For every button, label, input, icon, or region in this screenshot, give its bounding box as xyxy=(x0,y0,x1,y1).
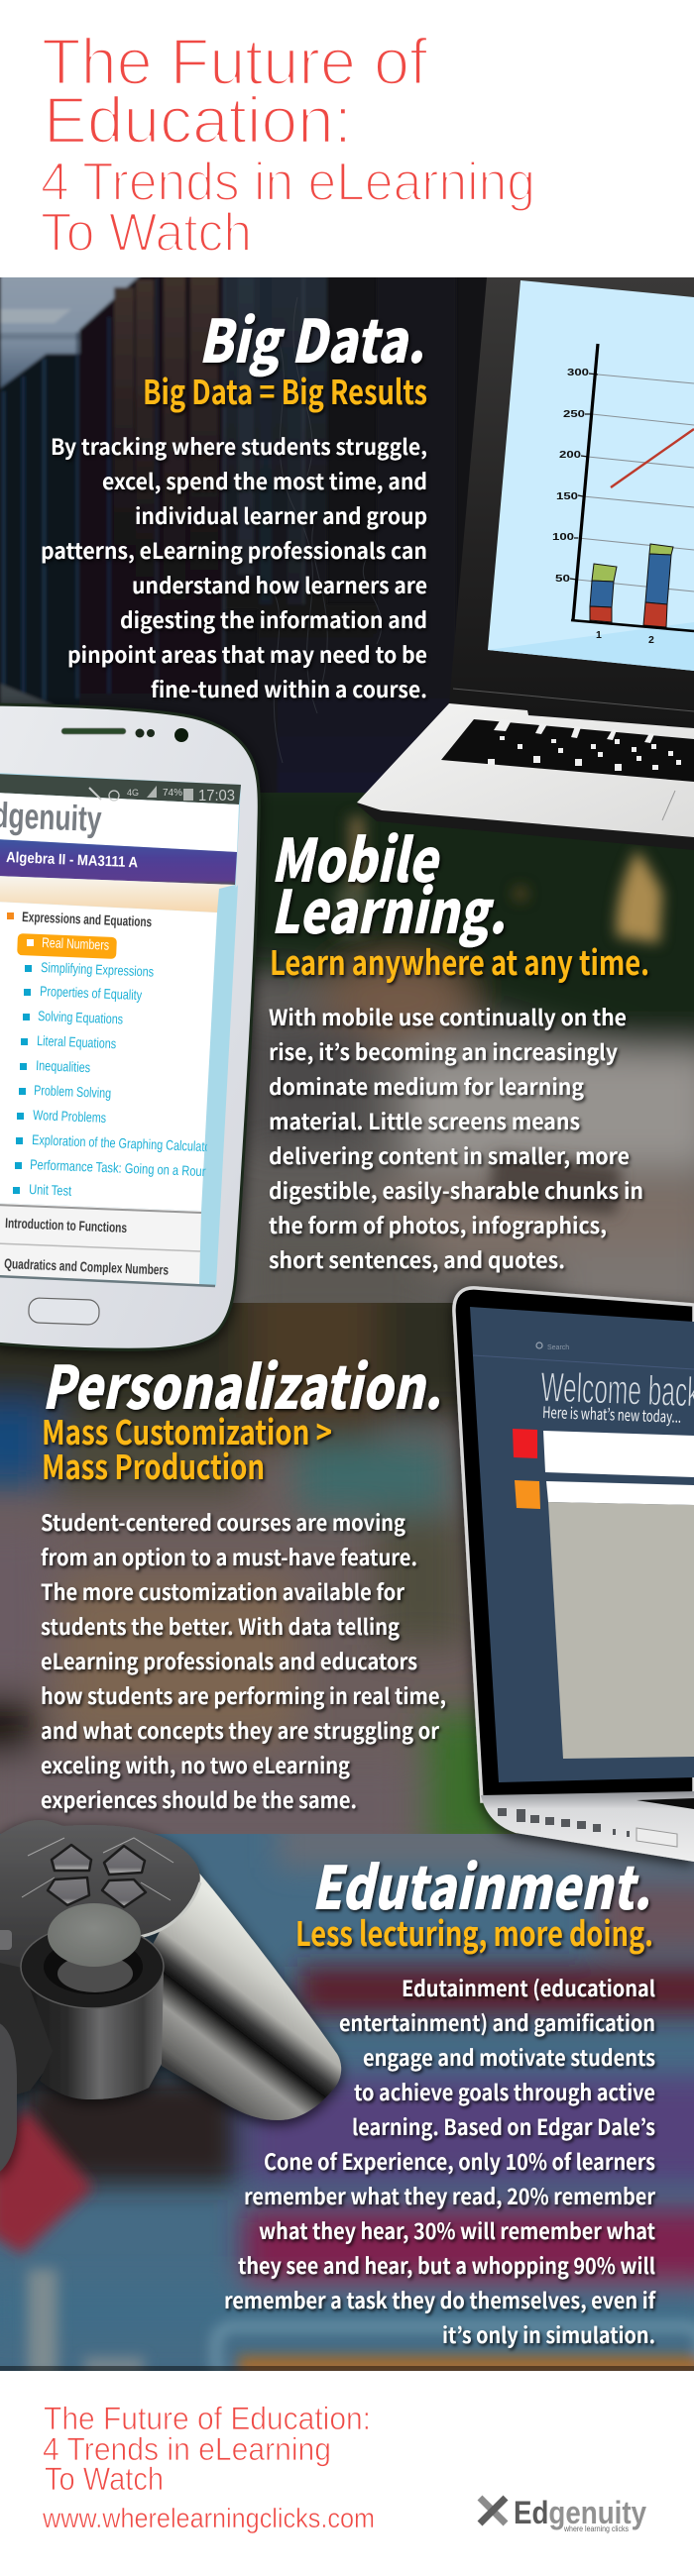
course outline list: Simplifying Expressions xyxy=(41,959,154,980)
controller top disc xyxy=(0,1820,200,1982)
body: edutainment xyxy=(224,1972,656,2350)
body: mobile learning: With mobile use continually on the xyxy=(269,1001,627,1032)
laptop lid xyxy=(449,277,694,728)
body: edutainment: it’s only in simulation. xyxy=(442,2318,655,2350)
body: personalization xyxy=(41,1506,446,1815)
logo wordmark: Edgenuity xyxy=(514,2495,646,2530)
course outline list: Properties of Equality xyxy=(40,983,142,1003)
search bar: Search xyxy=(547,1344,569,1351)
chart: 50 xyxy=(555,573,570,585)
face buttons xyxy=(48,1845,146,1907)
body: big data: pinpoint areas that may need to be xyxy=(67,638,427,670)
controller grip xyxy=(149,1868,341,2120)
title: 4 Trends in eLearning xyxy=(41,151,535,212)
illustration: laptop showing welcome dashboard xyxy=(454,1288,694,1862)
analog stick ring xyxy=(21,1925,164,2008)
left body xyxy=(0,1962,59,2100)
body: big data: patterns, eLearning professionals can xyxy=(41,534,427,566)
body: personalization: from an option to a must-have feature. xyxy=(41,1541,417,1572)
chart: 1 xyxy=(596,629,602,641)
body: personalization: eLearning professionals and educators xyxy=(41,1645,417,1676)
course title bar text: Algebra II - MA3111 A xyxy=(6,849,139,871)
section: mobile learning text xyxy=(269,813,649,1275)
title: The Future of xyxy=(42,25,428,98)
laptop silver base xyxy=(481,1791,694,1862)
status bar: 4G xyxy=(127,788,139,798)
collapsed units: Quadratics and Complex Numbers xyxy=(4,1255,170,1278)
side button xyxy=(0,1930,12,1950)
footer logo xyxy=(480,2495,646,2533)
panel: edutainment background (blurred game poster) xyxy=(0,1818,694,2381)
body: big data: fine-tuned within a course. xyxy=(151,673,427,704)
analog stick cap xyxy=(48,1903,141,1967)
chart screen xyxy=(488,280,694,671)
heading: mobile learning: Mobile xyxy=(271,813,441,900)
body: edutainment: remember what they read, 20% remember xyxy=(244,2180,655,2211)
chart: 250 xyxy=(563,408,585,420)
panel: big data background (server room) xyxy=(0,268,694,803)
section: edutainment text xyxy=(224,1841,656,2350)
logo tagline: where learning clicks xyxy=(563,2523,629,2533)
phone body xyxy=(0,704,259,1349)
laptop keyboard base xyxy=(357,703,694,850)
body: edutainment: Edutainment (educational xyxy=(402,1972,655,2003)
footer title: The Future of Education: xyxy=(44,2401,371,2436)
body: personalization: and what concepts they are struggling or xyxy=(41,1714,439,1746)
chart: 150 xyxy=(556,490,578,502)
body: edutainment: Cone of Experience, only 10% of learners xyxy=(264,2145,655,2177)
panel: personalization background (blurred photo) xyxy=(0,1268,694,1858)
body: mobile learning: the form of photos, infographics, xyxy=(269,1209,607,1240)
body: edutainment: they see and hear, but a whopping 90% will xyxy=(238,2249,655,2281)
course outline list: Exploration of the Graphing Calculator xyxy=(32,1131,215,1154)
dashboard tiles xyxy=(513,1429,694,1759)
body: edutainment: entertainment) and gamification xyxy=(339,2006,655,2038)
course outline list: Literal Equations xyxy=(37,1032,116,1051)
status bar xyxy=(89,786,235,805)
course outline list: Word Problems xyxy=(33,1107,106,1126)
heading: mobile learning xyxy=(271,813,506,951)
body: edutainment: to achieve goals through active xyxy=(354,2076,655,2107)
section: personalization text xyxy=(41,1341,446,1815)
illustration: game controller xyxy=(0,1820,341,2175)
body: big data: understand how learners are xyxy=(132,569,427,600)
course outline list: Inequalities xyxy=(36,1057,90,1075)
course outline list: Problem Solving xyxy=(34,1082,111,1101)
body: personalization: Student-centered courses are moving xyxy=(41,1506,405,1538)
body: big data: excel, spend the most time, and xyxy=(102,465,427,496)
course outline list: Real Numbers xyxy=(42,934,109,953)
subheading: personalization xyxy=(42,1406,332,1489)
face button outlines xyxy=(22,1838,174,1900)
body: big data xyxy=(41,430,427,704)
search bar xyxy=(473,1342,694,1369)
body: edutainment: engage and motivate students xyxy=(363,2041,655,2073)
course outline list: Unit Test xyxy=(29,1181,72,1199)
body: edutainment: remember a task they do themselves, even if xyxy=(224,2284,656,2315)
subheading: personalization: Mass Customization > xyxy=(42,1406,332,1454)
body: big data: By tracking where students struggle, xyxy=(51,430,427,462)
footer title: To Watch xyxy=(45,2461,164,2497)
phone speaker and camera xyxy=(61,728,188,742)
logo mark xyxy=(480,2498,506,2523)
heading: mobile learning: Learning. xyxy=(271,865,506,951)
phone screen xyxy=(0,773,241,1286)
course outline list: Solving Equations xyxy=(38,1008,123,1026)
section: big data text xyxy=(41,294,427,704)
panel: mobile learning background (blurred student photo) xyxy=(0,763,694,1328)
body: big data: individual learner and group xyxy=(135,499,427,531)
body: personalization: students the better. With data telling xyxy=(41,1610,400,1642)
title: Education: xyxy=(44,83,352,157)
status bar: 17:03 xyxy=(198,788,235,805)
title: To Watch xyxy=(41,201,252,263)
chart: 200 xyxy=(559,449,581,461)
chart: 100 xyxy=(552,531,574,543)
illustration: smartphone showing course outline xyxy=(0,704,259,1349)
phone home button xyxy=(29,1298,99,1325)
chart: 300 xyxy=(567,367,589,378)
analog stick column xyxy=(22,1967,164,2099)
footer title xyxy=(43,2401,371,2497)
body: mobile learning xyxy=(269,1001,643,1275)
body: personalization: The more customization available for xyxy=(41,1575,405,1607)
body: edutainment: what they hear, 30% will remember what xyxy=(259,2214,655,2246)
body: mobile learning: rise, it’s becoming an increasingly xyxy=(269,1035,618,1067)
course outline list: Expressions and Equations xyxy=(22,909,153,929)
chart: 2 xyxy=(648,634,654,646)
heading: big data: Big Data. xyxy=(198,294,424,380)
body: mobile learning: short sentences, and quotes. xyxy=(269,1243,565,1275)
heading: personalization: Personalization. xyxy=(42,1341,441,1427)
body: personalization: exceling with, no two eLearning xyxy=(41,1749,350,1780)
subheading: personalization: Mass Production xyxy=(42,1441,265,1489)
footer url: www.wherelearningclicks.com xyxy=(42,2503,375,2533)
status bar: 74% xyxy=(163,788,182,799)
body: mobile learning: delivering content in smaller, more xyxy=(269,1139,630,1171)
body: big data: digesting the information and xyxy=(120,603,427,635)
body: mobile learning: digestible, easily-sharable chunks in xyxy=(269,1174,643,1206)
body: mobile learning: dominate medium for learning xyxy=(269,1070,584,1102)
collapsed units xyxy=(4,1215,170,1278)
body: personalization: how students are performing in real time, xyxy=(41,1679,446,1711)
laptop lid frame xyxy=(454,1288,694,1801)
footer title: 4 Trends in eLearning xyxy=(43,2431,331,2467)
title xyxy=(41,25,535,263)
side ports xyxy=(498,1808,677,1847)
subheading: big data: Big Data = Big Results xyxy=(143,366,427,414)
course outline list xyxy=(7,909,215,1199)
course outline list: Performance Task: Going on a Round xyxy=(30,1156,214,1179)
collapsed units: Introduction to Functions xyxy=(5,1215,128,1235)
chart xyxy=(552,344,694,646)
keyboard keys xyxy=(441,719,694,782)
body: edutainment: learning. Based on Edgar Dale’s xyxy=(352,2110,655,2142)
body: personalization: experiences should be the same. xyxy=(41,1783,357,1815)
illustration: laptop with bar chart xyxy=(357,277,694,850)
body: mobile learning: material. Little screens means xyxy=(269,1105,580,1136)
dashboard screen xyxy=(470,1307,694,1782)
